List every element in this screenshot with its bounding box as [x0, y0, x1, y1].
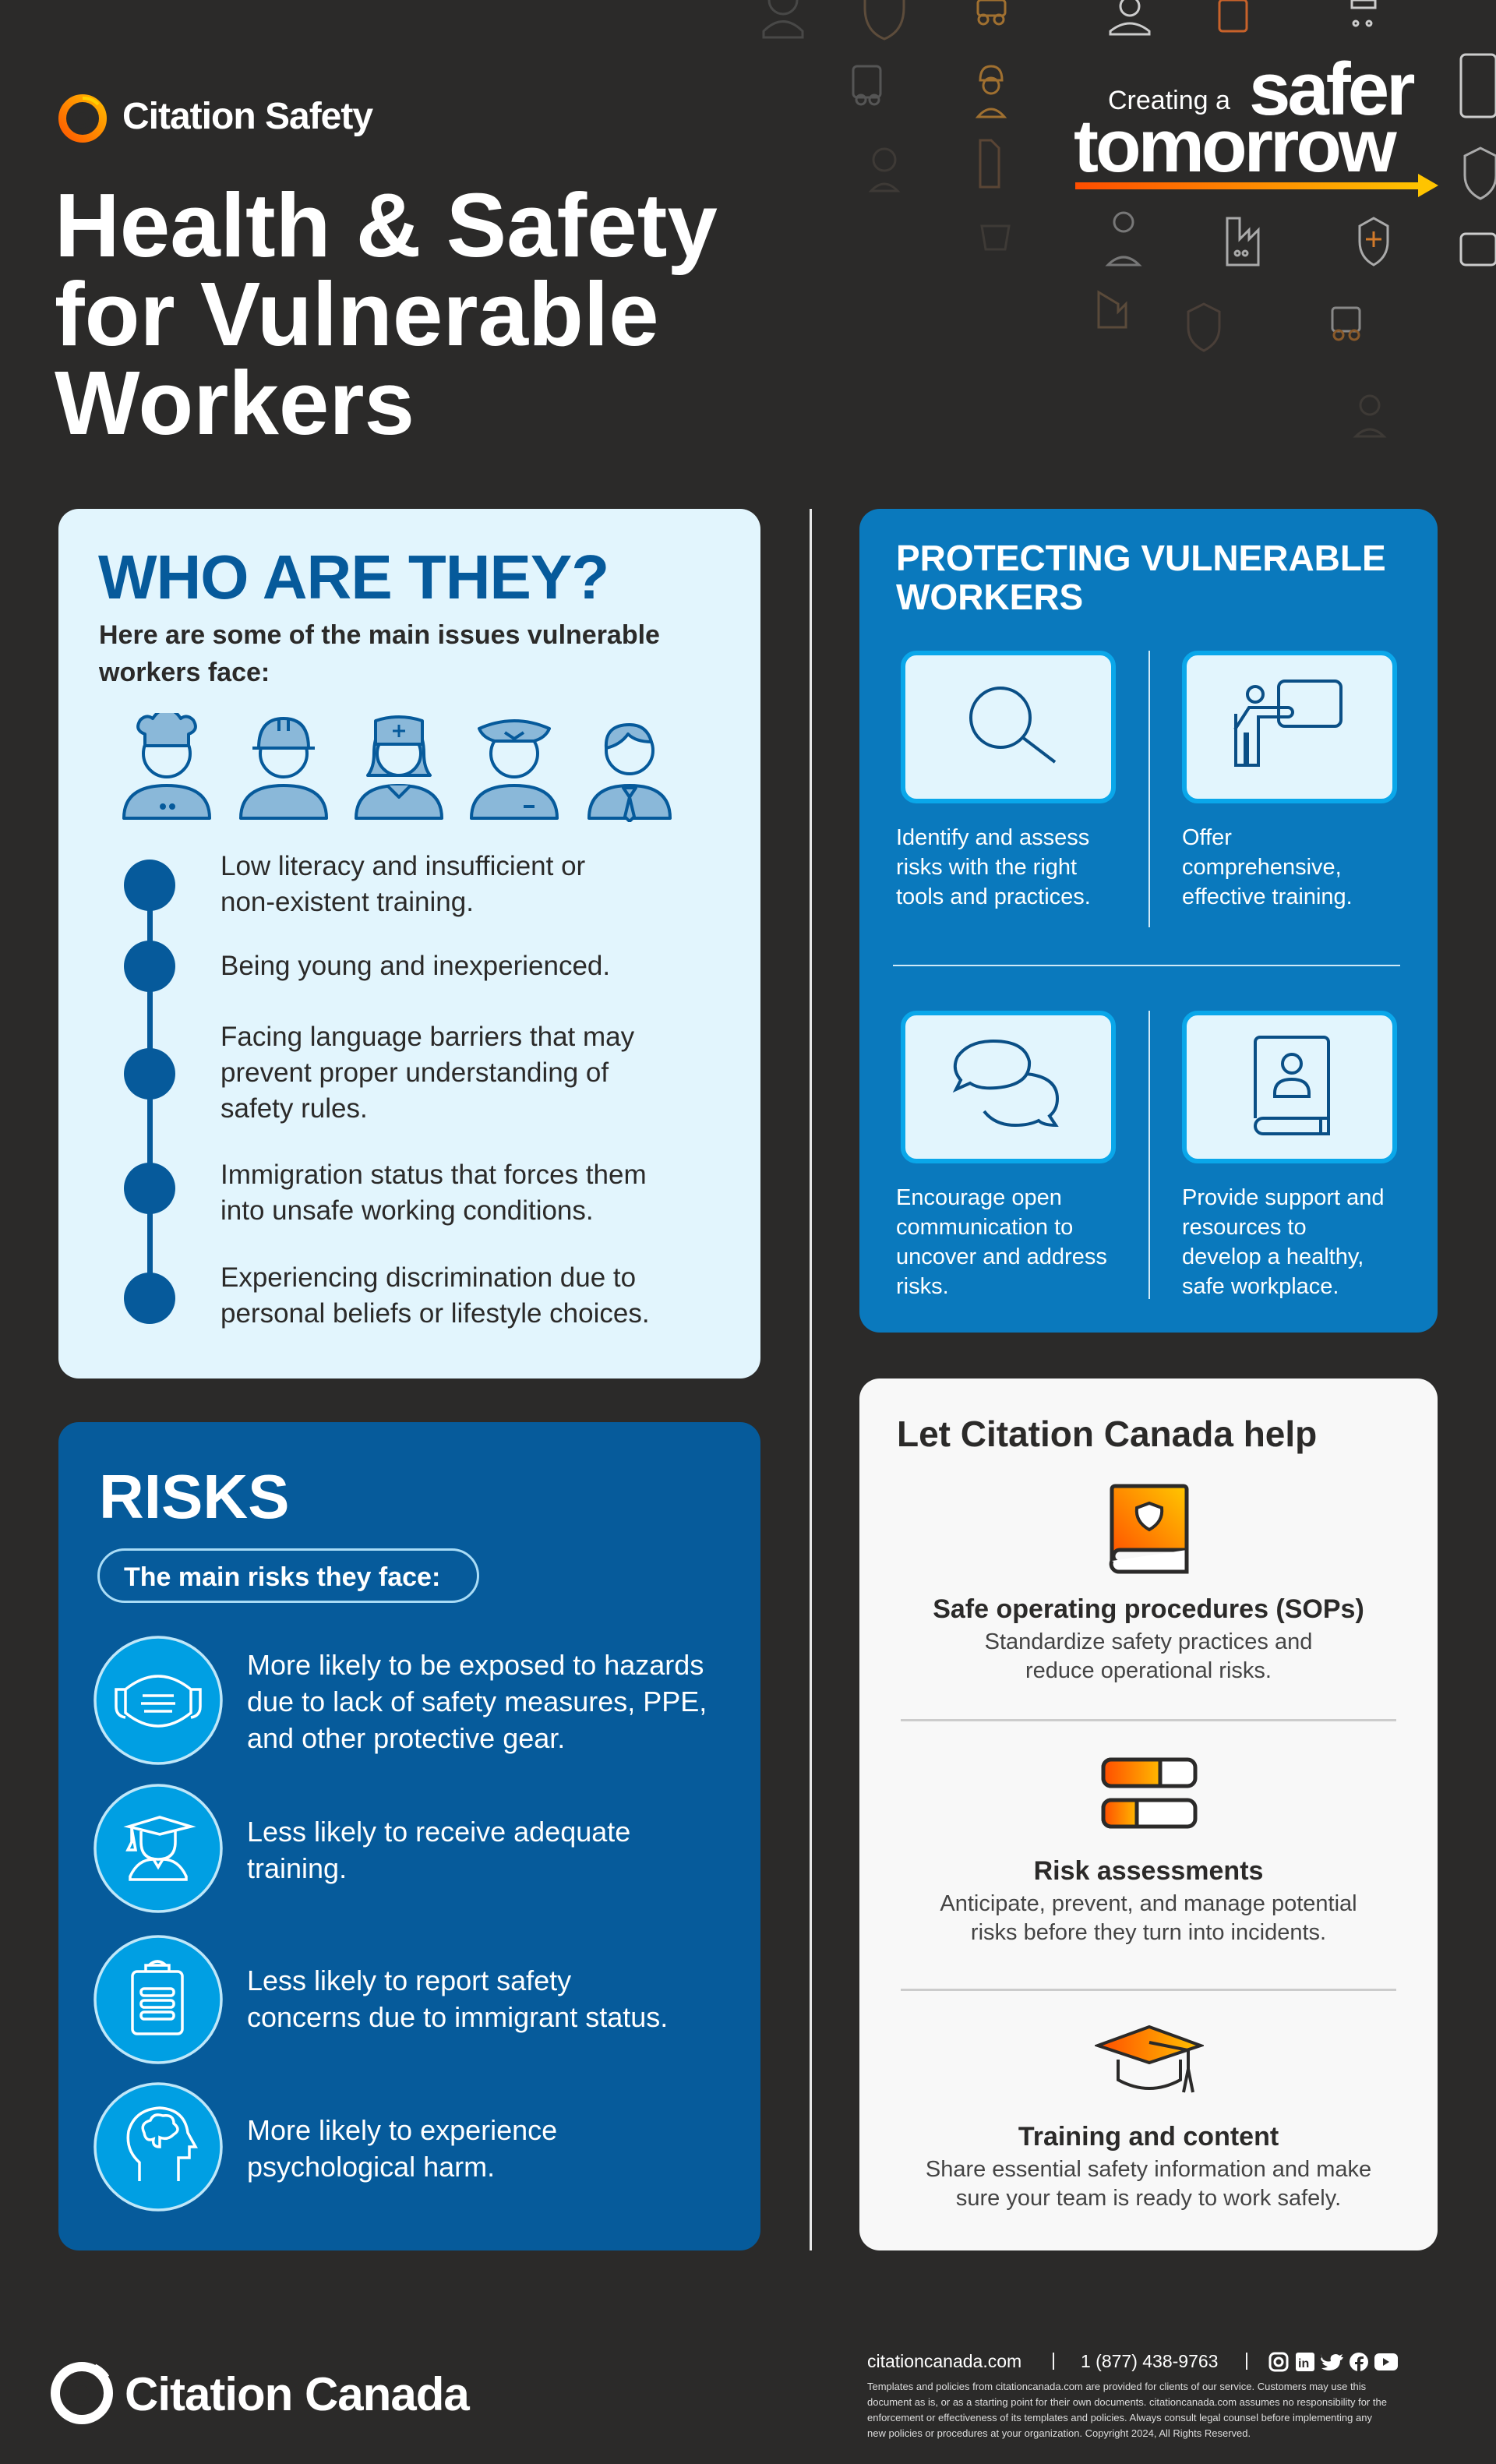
text: SOP: Safe operating procedures (SOPs) [933, 1594, 1364, 1624]
text: risks list: due to lack of safety measures, PPE, [247, 1686, 707, 1717]
footer contact: 1 (877) 438-9763 [1081, 2351, 1218, 2371]
background icon pattern [762, 0, 1496, 438]
text: SOP: reduce operational risks. [1025, 1658, 1272, 1683]
icons: social: in [1298, 2357, 1309, 2370]
divider vertical [810, 509, 812, 2250]
text: risks list: psychological harm. [247, 2151, 495, 2183]
text: issues list: non-existent training. [221, 887, 474, 917]
text: risk assessments [940, 1856, 1357, 1945]
footer disclaimer: new policies or procedures at your organization. Copyright 2024, All Rights Reserved. [867, 2427, 1251, 2439]
text: risks list: Less likely to report safety [247, 1964, 571, 1996]
text: communication: risks. [896, 1274, 949, 1299]
title: Health & Safety [55, 175, 718, 276]
text: training and content: Training and content [1018, 2122, 1279, 2152]
tagline: Creating a safer tomorrow: Creating a [1108, 86, 1230, 115]
pill: main risks [97, 1548, 479, 1603]
icon: graduate [94, 1784, 223, 1913]
panel: protecting vulnerable workers [859, 509, 1438, 1333]
text: risks list: Less likely to receive adequate [247, 1816, 630, 1848]
panel: who are they [58, 509, 760, 1378]
text: training: effective training. [1182, 884, 1353, 909]
panel: let citation canada help [859, 1378, 1438, 2250]
text: risks list: More likely to experience [247, 2114, 557, 2146]
panel: risks [58, 1422, 760, 2250]
heading: risks: RISKS [99, 1462, 290, 1531]
text: issues list: Low literacy and insufficient or [221, 851, 585, 881]
text: risks list [247, 1649, 707, 2183]
text: issues list: Experiencing discrimination due to [221, 1262, 636, 1293]
text: identify: Identify and assess [896, 825, 1089, 850]
text: issues list: Facing language barriers that may [221, 1022, 634, 1052]
text: issues list: prevent proper understanding of [221, 1057, 609, 1088]
footer disclaimer [867, 2381, 1387, 2439]
text: identify [896, 825, 1091, 909]
text: support: resources to [1182, 1215, 1307, 1240]
text: SOP: Standardize safety practices and [985, 1629, 1312, 1654]
text: SOP [933, 1594, 1364, 1683]
tagline: Creating a safer tomorrow: safer [1249, 48, 1412, 131]
tagline: Creating a safer tomorrow [1074, 48, 1438, 197]
icon: SOP book [1110, 1484, 1189, 1574]
icon: mask [94, 1636, 223, 1765]
title: for Vulnerable [55, 263, 659, 365]
pill: main risks: The main risks they face: [124, 1562, 440, 1592]
footer disclaimer: enforcement or effectiveness of its templates and policies. Always consult legal counsel before implementing any [867, 2412, 1372, 2423]
logo: Citation Safety: Citation Safety [122, 96, 372, 137]
footer contact: | [1051, 2349, 1056, 2370]
icon: head [94, 2082, 223, 2212]
text: risk assessments: Anticipate, prevent, and manage potential [940, 1891, 1357, 1916]
text: support: develop a healthy, [1182, 1244, 1364, 1269]
logo: Citation Safety [58, 94, 373, 143]
text: risks list: training. [247, 1852, 347, 1884]
title: Workers [55, 352, 415, 454]
text: training and content: Share essential safety information and make [926, 2157, 1371, 2182]
timeline [124, 860, 175, 1324]
text: training: comprehensive, [1182, 855, 1342, 880]
subtitle: workers face: [99, 658, 270, 687]
text: identify: risks with the right [896, 855, 1077, 880]
text: support: safe workplace. [1182, 1274, 1339, 1299]
text: communication: Encourage open [896, 1185, 1062, 1210]
text: training: Offer [1182, 825, 1232, 850]
subtitle: Here are some of the main issues vulnerable [99, 620, 660, 650]
text: issues list: Immigration status that forces them [221, 1160, 647, 1190]
subtitle [98, 620, 660, 687]
heading: protecting [896, 538, 1386, 617]
icons: workers [122, 713, 672, 822]
heading: who are they: WHO ARE THEY? [98, 542, 609, 612]
footer contact [867, 2349, 1398, 2372]
footer disclaimer: document as is, or as a starting point for their own documents. citationcanada.com assumes no responsibility for the [867, 2396, 1387, 2408]
text: risk assessments: Risk assessments [1034, 1856, 1263, 1886]
text: training and content [926, 2122, 1371, 2211]
text: risks list: More likely to be exposed to hazards [247, 1649, 704, 1681]
footer logo: Citation Canada [51, 2362, 471, 2424]
text: communication: uncover and address [896, 1244, 1107, 1269]
heading: protecting: WORKERS [896, 577, 1083, 617]
icon: risk assessment bars [1102, 1758, 1197, 1828]
text: risks list: and other protective gear. [247, 1722, 565, 1754]
text: issues list: Being young and inexperienced. [221, 951, 610, 981]
card: identify risks [901, 651, 1116, 803]
card: training [1182, 651, 1397, 803]
text: risk assessments: risks before they turn into incidents. [971, 1920, 1326, 1945]
text: communication [896, 1185, 1107, 1299]
footer disclaimer: Templates and policies from citationcanada.com are provided for clients of our service. Customers may use this [867, 2381, 1366, 2392]
text: support [1182, 1185, 1385, 1299]
text: issues list: safety rules. [221, 1093, 368, 1124]
heading: protecting: PROTECTING VULNERABLE [896, 538, 1386, 578]
text: support: Provide support and [1182, 1185, 1385, 1210]
footer logo: Citation Canada: Citation Canada [125, 2368, 469, 2420]
tagline: Creating a safer tomorrow: tomorrow [1074, 104, 1394, 188]
text: issues list: into unsafe working conditions. [221, 1195, 594, 1226]
footer contact: citationcanada.com [867, 2351, 1021, 2371]
text: training [1182, 825, 1353, 909]
text: issues list: personal beliefs or lifestyle choices. [221, 1298, 650, 1329]
icons: social [1268, 2352, 1398, 2372]
text: communication: communication to [896, 1215, 1073, 1240]
card: communication [901, 1011, 1116, 1163]
dividers [1148, 651, 1150, 927]
text: issues list [221, 851, 650, 1329]
heading: help: Let Citation Canada help [897, 1414, 1317, 1454]
icon: clipboard [94, 1935, 223, 2064]
text: risks list: concerns due to immigrant status. [247, 2001, 668, 2033]
title [55, 175, 718, 454]
icon: graduation cap [1095, 2025, 1204, 2093]
text: training and content: sure your team is ready to work safely. [956, 2186, 1341, 2211]
risk items [94, 1636, 707, 2212]
card: support [1182, 1011, 1397, 1163]
footer contact: | [1244, 2349, 1249, 2370]
text: identify: tools and practices. [896, 884, 1091, 909]
